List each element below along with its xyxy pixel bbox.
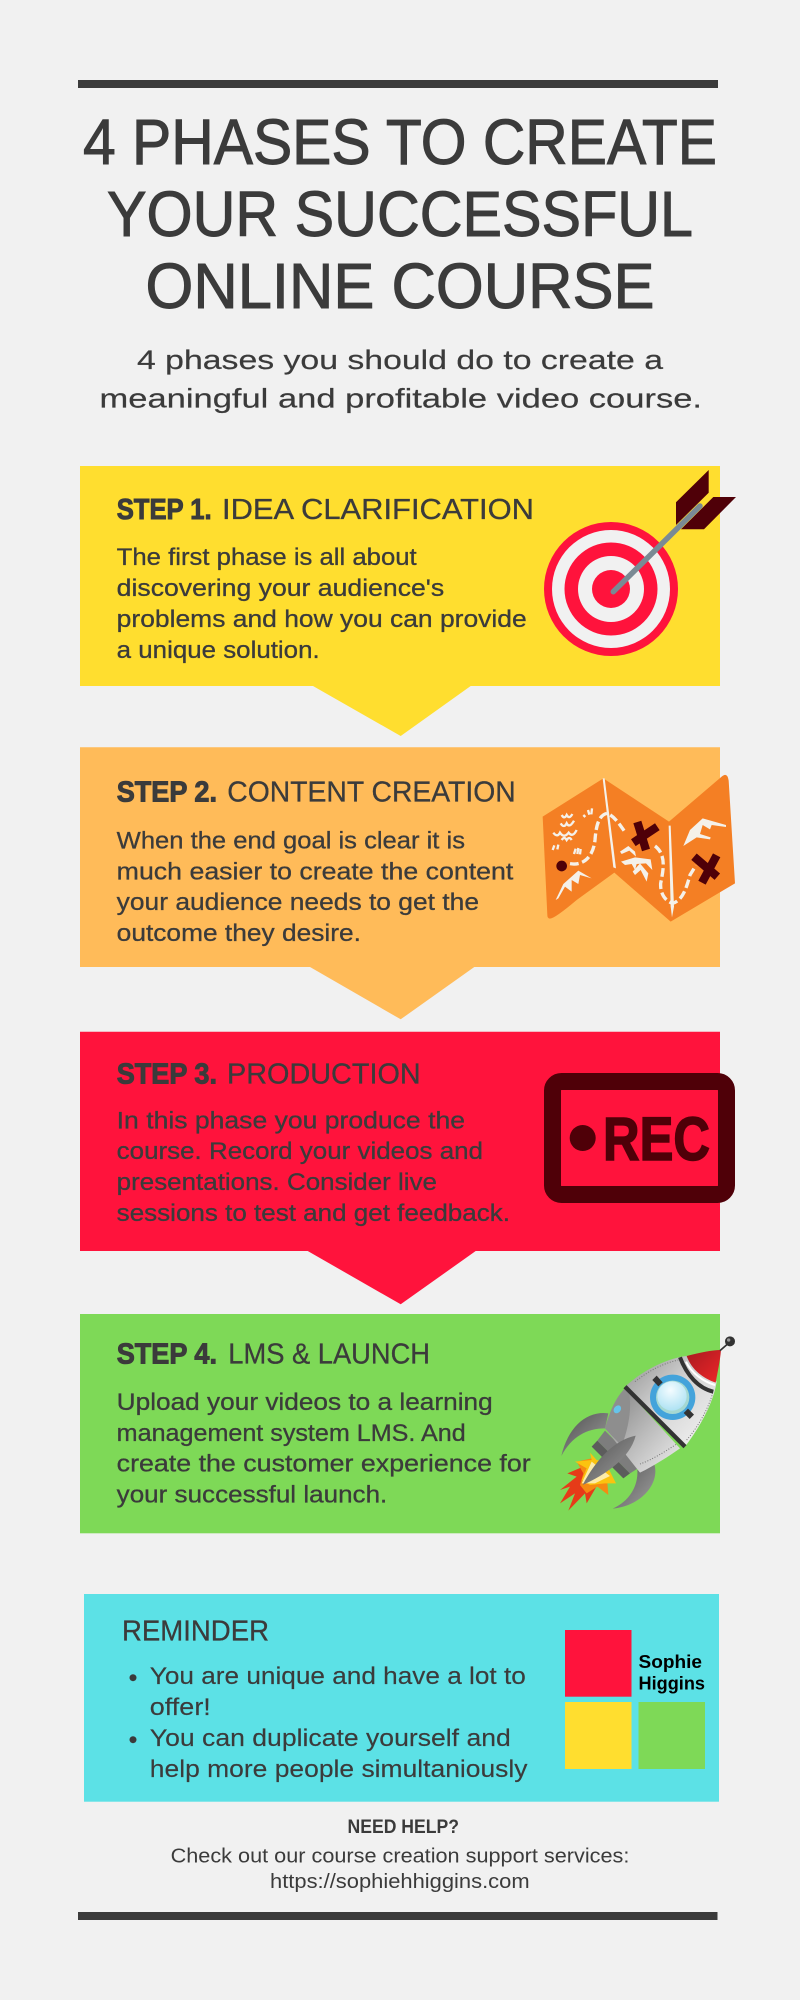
title: ONLINE COURSE: [146, 250, 654, 322]
step 3 body text: sessions to test and get feedback.: [117, 1200, 510, 1227]
reminder background: [84, 1594, 719, 1802]
reminder bullet list: help more people simultaniously: [150, 1756, 528, 1783]
panel background: [80, 1314, 720, 1533]
step 2 body text: your audience needs to get the: [117, 889, 479, 916]
panel: reminder: [84, 1594, 719, 1802]
step 3 body text: course. Record your videos and: [117, 1138, 483, 1165]
step 2 body text: [117, 827, 514, 947]
step 2 heading: CONTENT CREATION: [227, 777, 516, 809]
logo: Sophie Higgins: Sophie: [638, 1651, 702, 1672]
icon: treasure map: [543, 775, 735, 922]
title: [83, 106, 717, 322]
step 3 body text: In this phase you produce the: [117, 1107, 465, 1134]
panel background with arrow: [80, 1032, 720, 1304]
panel: step 4 LMS and launch: [80, 1314, 735, 1533]
step 4 body text: create the customer experience for: [117, 1451, 531, 1478]
step 1 heading: STEP 1.: [117, 494, 212, 526]
step 3 heading: STEP 3.: [117, 1058, 217, 1090]
step 4 body text: [117, 1389, 531, 1509]
title: YOUR SUCCESSFUL: [107, 178, 693, 250]
icon: REC video frame: [552, 1082, 726, 1194]
step 1 body text: problems and how you can provide: [117, 606, 527, 633]
subtitle: [100, 345, 702, 414]
icon: target with arrow: [544, 470, 736, 656]
panel: step 2 content creation: [80, 747, 735, 1019]
footer: need help: https://sophiehhiggins.com: [270, 1871, 530, 1893]
reminder heading: REMINDER: [122, 1616, 269, 1648]
reminder bullet list: [130, 1663, 528, 1783]
panel: step 1 idea clarification: [80, 466, 736, 736]
step 1 body text: discovering your audience's: [117, 575, 444, 602]
step 3 body text: [117, 1107, 510, 1227]
step 3 heading: [117, 1058, 421, 1090]
step 4 body text: your successful launch.: [117, 1482, 387, 1509]
icon: REC video frame: REC: [603, 1105, 710, 1173]
reminder bullet list: offer!: [150, 1694, 211, 1721]
step 4 body text: management system LMS. And: [117, 1420, 466, 1447]
panel: step 3 production: [80, 1032, 726, 1304]
step 2 body text: much easier to create the content: [117, 858, 514, 885]
subtitle: 4 phases you should do to create a: [137, 345, 664, 375]
panel background with arrow: [80, 466, 720, 736]
step 2 body text: When the end goal is clear it is: [117, 827, 465, 854]
footer: need help: [171, 1817, 629, 1893]
footer: need help: Check out our course creation support services:: [171, 1846, 629, 1868]
step 1 body text: [117, 544, 527, 664]
reminder bullet list: You can duplicate yourself and: [150, 1725, 511, 1752]
logo: Sophie Higgins: Higgins: [638, 1672, 705, 1693]
step 2 body text: outcome they desire.: [117, 920, 361, 947]
step 3 body text: presentations. Consider live: [117, 1169, 437, 1196]
step 1 heading: IDEA CLARIFICATION: [222, 494, 534, 526]
step 4 heading: STEP 4.: [117, 1339, 217, 1371]
bottom rule: [78, 1912, 718, 1920]
step 3 heading: PRODUCTION: [227, 1058, 421, 1090]
reminder bullet list: You are unique and have a lot to: [150, 1663, 526, 1690]
step 4 body text: Upload your videos to a learning: [117, 1389, 493, 1416]
logo: Sophie Higgins: [565, 1630, 705, 1769]
footer: need help: NEED HELP?: [348, 1817, 459, 1838]
top rule: [78, 80, 718, 88]
panel background with arrow: [80, 747, 720, 1019]
step 1 body text: The first phase is all about: [117, 544, 417, 571]
step 2 heading: STEP 2.: [117, 777, 217, 809]
step 4 heading: [117, 1339, 430, 1371]
step 4 heading: LMS & LAUNCH: [228, 1339, 430, 1371]
icon: rocket: [560, 1336, 735, 1511]
step 1 body text: a unique solution.: [117, 637, 320, 664]
subtitle: meaningful and profitable video course.: [100, 384, 702, 414]
title: 4 PHASES TO CREATE: [83, 106, 717, 178]
